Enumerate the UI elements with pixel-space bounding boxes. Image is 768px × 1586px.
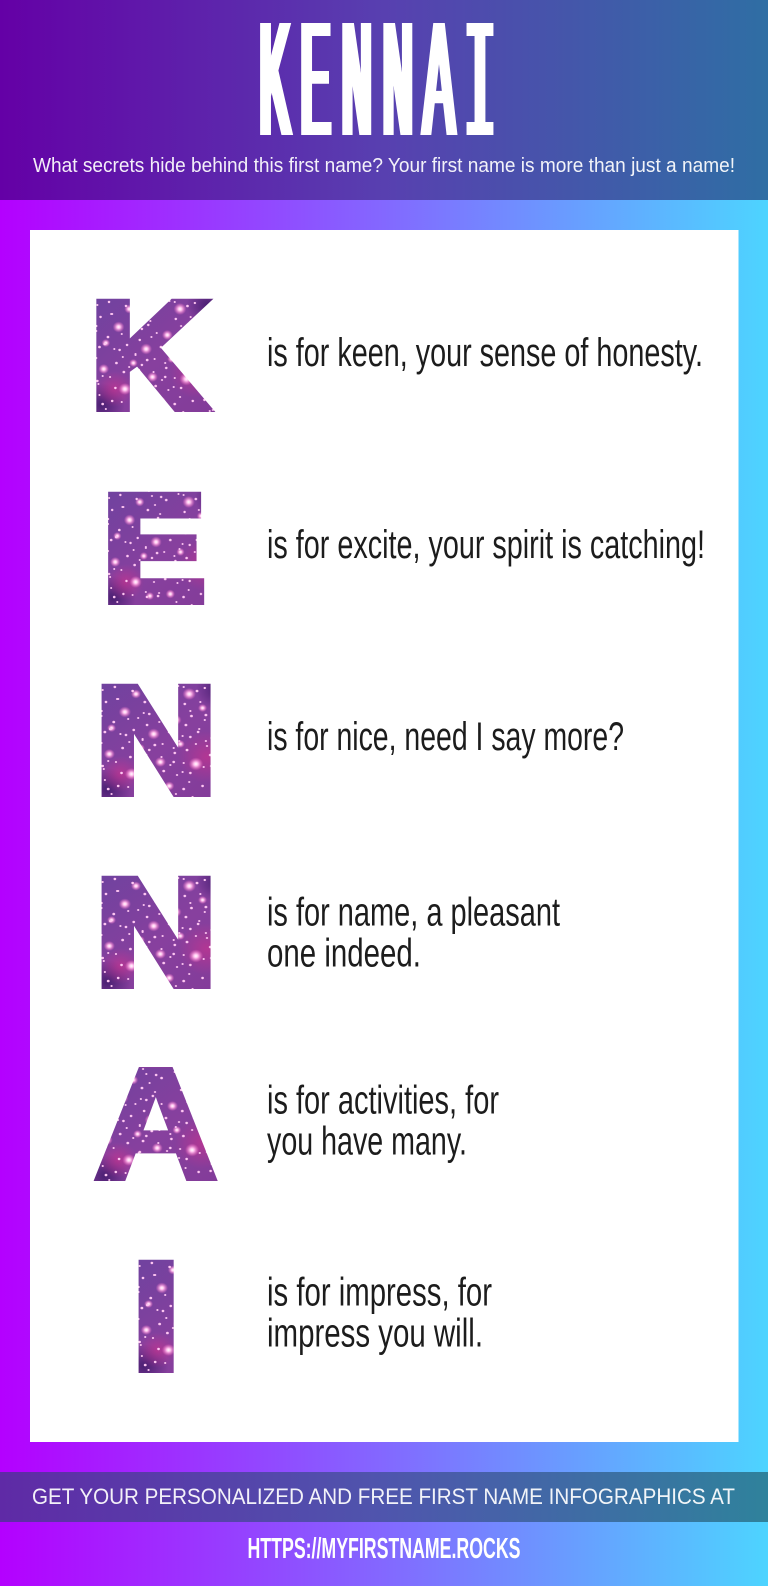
- text: I lines: impress you will.: [267, 1312, 483, 1356]
- letter N: N: [96, 657, 216, 824]
- row: E: [103, 465, 705, 633]
- header band: [0, 0, 768, 200]
- white content panel: [30, 230, 738, 1442]
- row: K: [91, 271, 703, 439]
- row: I: [133, 1233, 492, 1400]
- row: A: [94, 1036, 499, 1211]
- text: I lines: [267, 1271, 492, 1356]
- letter K: K: [91, 271, 206, 439]
- text: N second lines: is for name, a pleasant: [267, 891, 560, 935]
- footer url: HTTPS://MYFIRSTNAME.ROCKS: [248, 1533, 520, 1565]
- text: A lines: is for activities, for: [267, 1079, 499, 1123]
- letter E: E: [103, 465, 205, 633]
- text: N second lines: [267, 891, 560, 976]
- subtitle: What secrets hide behind this first name? Your first name is more than just a name!: [33, 155, 735, 177]
- text: A lines: [267, 1079, 499, 1164]
- row: N second: [96, 849, 560, 1016]
- text: N line: is for nice, need I say more?: [267, 715, 624, 759]
- letter N: N: [96, 849, 216, 1016]
- row: N: [96, 657, 624, 824]
- text: A lines: you have many.: [267, 1120, 467, 1164]
- footer call-to-action strip: [0, 1472, 768, 1522]
- text: I lines: is for impress, for: [267, 1271, 492, 1315]
- letter A: A: [94, 1036, 218, 1211]
- text: N second lines: one indeed.: [267, 932, 421, 976]
- letter I: I: [133, 1233, 179, 1400]
